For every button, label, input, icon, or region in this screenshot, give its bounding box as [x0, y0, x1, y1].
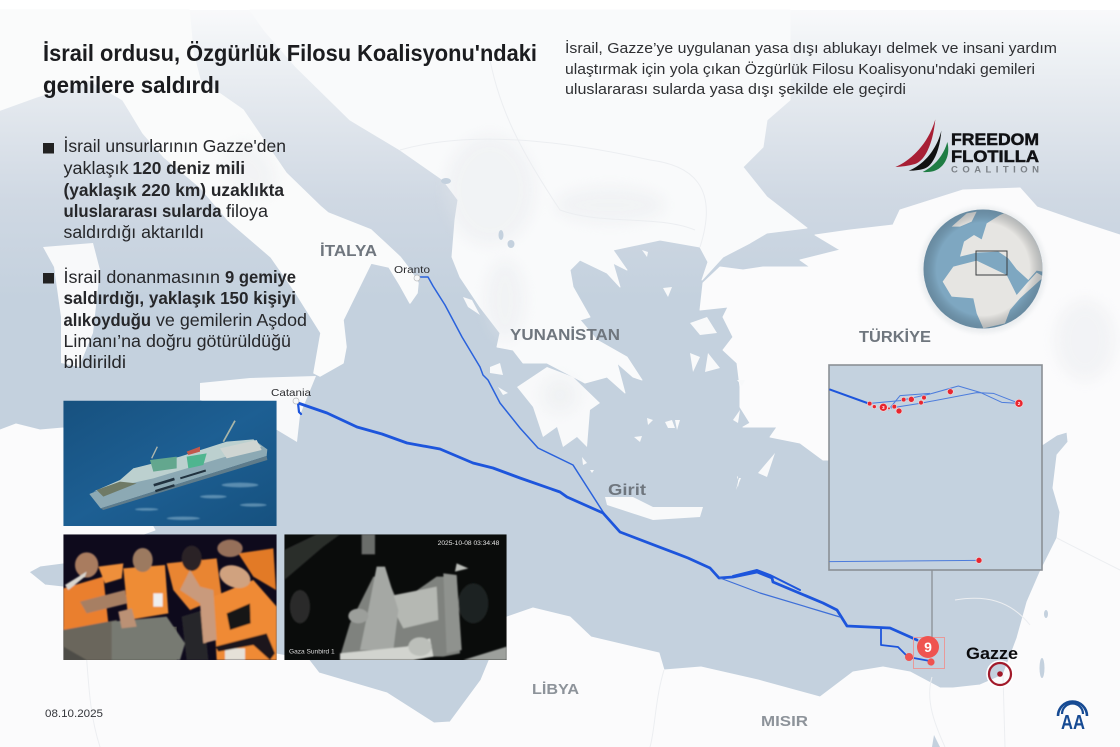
- city labels: Catania: [271, 387, 311, 399]
- photo: ship at sea: [63, 401, 277, 526]
- bullet: attack location: [43, 136, 286, 242]
- inset connector and marker: 9 ships: 9: [924, 639, 932, 655]
- bullet: attack location: yaklaşık: [64, 158, 129, 178]
- photo: night surveillance of boat: Gaza Sunbird 1: [289, 649, 335, 656]
- bullet: ships and detainees: Limanı’na doğru götürüldüğü: [64, 331, 291, 351]
- intro paragraph: [565, 39, 1057, 98]
- country labels: İTALYA: [320, 242, 377, 260]
- route: Oranto to interception area: [414, 275, 605, 515]
- route: Catania to interception area: [293, 398, 930, 661]
- photo: detained activists in life vests: [63, 534, 277, 660]
- islands: [43, 243, 775, 520]
- logo: Freedom Flotilla Coalition: FLOTILLA: [951, 147, 1039, 166]
- bullet: attack location: saldırdığı aktarıldı: [64, 222, 204, 242]
- intro paragraph: uluslararası sularda yasa dışı şekilde ele geçirdi: [565, 81, 906, 98]
- bullet: attack location: 120 deniz mili: [132, 158, 245, 178]
- country labels: Girit: [608, 482, 647, 499]
- city labels: [271, 264, 430, 399]
- bullet: attack location: filoya: [226, 201, 268, 221]
- land: Italy: [0, 10, 418, 376]
- logo: Freedom Flotilla Coalition: COALITION: [951, 164, 1039, 176]
- bullet: attack location: İsrail unsurlarının Gazze'den: [64, 136, 286, 156]
- intro paragraph: ulaştırmak için yola çıkan Özgürlük Filosu Koalisyonu'ndaki gemileri: [565, 60, 1035, 78]
- bullet: ships and detainees: alıkoyduğu: [64, 310, 151, 330]
- bullet: attack location: uluslararası sularda: [64, 201, 222, 221]
- inset map: interception points: 2: [1018, 401, 1021, 406]
- photo: night surveillance of boat: [284, 534, 507, 660]
- land: Anatolia, Levant and North Africa: [0, 188, 1120, 747]
- title: İsrail ordusu, Özgürlük Filosu Koalisyonu'ndaki: [43, 40, 537, 66]
- country labels: [320, 242, 931, 730]
- bullet: ships and detainees: saldırdığı, yaklaşık 150 kişiyi: [64, 288, 296, 308]
- country labels: LİBYA: [532, 681, 579, 698]
- locator globe: [920, 207, 1053, 333]
- title: gemilere saldırdı: [43, 72, 220, 98]
- marker: Gazze: [966, 644, 1018, 687]
- bullet: ships and detainees: İsrail donanmasının: [64, 267, 220, 287]
- terrain shading: [214, 133, 1115, 413]
- bullet: attack location: (yaklaşık 220 km) uzaklıkta: [64, 180, 284, 200]
- logo: AA: AA: [1061, 712, 1085, 734]
- country labels: TÜRKİYE: [859, 327, 931, 346]
- title: [43, 40, 537, 98]
- logo: Freedom Flotilla Coalition: FREEDOM: [951, 130, 1039, 149]
- logo: Freedom Flotilla Coalition: [895, 119, 1039, 176]
- land: Balkans: [250, 10, 807, 393]
- photo: night surveillance of boat: 2025-10-08 03:34:48: [438, 540, 500, 547]
- inset map: interception points: [829, 365, 1042, 570]
- date: 08.10.2025: [45, 708, 103, 720]
- intro paragraph: İsrail, Gazze’ye uygulanan yasa dışı ablukayı delmek ve insani yardım: [565, 39, 1057, 57]
- logo: AA: [1058, 702, 1087, 734]
- bullet: ships and detainees: bildirildi: [64, 352, 126, 372]
- bullet: ships and detainees: [43, 267, 307, 372]
- country labels: YUNANİSTAN: [510, 326, 620, 344]
- country labels: MISIR: [761, 713, 808, 730]
- inset map: interception points: 3: [882, 405, 885, 410]
- bullet: ships and detainees: ve gemilerin Aşdod: [156, 310, 307, 330]
- marker: Gazze: Gazze: [966, 644, 1018, 663]
- bullet: ships and detainees: 9 gemiye: [225, 267, 296, 287]
- city labels: Oranto: [394, 264, 430, 276]
- inset connector and marker: 9 ships: [905, 570, 944, 668]
